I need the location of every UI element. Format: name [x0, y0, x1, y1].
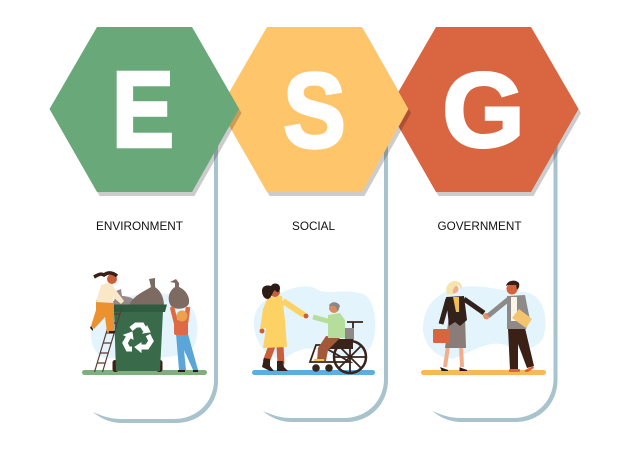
hexagon: S social: [220, 27, 411, 196]
heading: social: SOCIAL: [292, 219, 335, 233]
icon: rubbish bags in bin: [113, 278, 164, 306]
panel: social card edge: [263, 139, 388, 422]
figure: person lifting bag: [169, 279, 198, 372]
figure: man in wheelchair: [310, 302, 366, 373]
illustration: business handshake: [421, 281, 546, 375]
figure: businesswoman with briefcase: [433, 281, 489, 370]
icon: recycle arrows: [124, 325, 151, 352]
icon: ladder: [94, 307, 122, 372]
figure: woman climbing ladder: [90, 273, 124, 333]
hexagon: G governance: [388, 27, 581, 196]
heading: government: GOVERNMENT: [438, 219, 522, 233]
hexagon: S social: S: [283, 53, 346, 170]
icon: green bin: [111, 304, 167, 372]
illustration: helping wheelchair user: [252, 284, 375, 375]
illustration: recycling bin scene: [82, 273, 207, 375]
panel: environment card edge: [93, 140, 218, 423]
hexagon: G governance: G: [442, 52, 525, 170]
hexagon: E environment: [50, 27, 242, 196]
figure: woman in yellow dress: [260, 284, 308, 371]
heading: environment: ENVIRONMENT: [96, 219, 184, 233]
hexagon: E environment: E: [112, 50, 174, 170]
panel: government card edge: [432, 139, 558, 422]
figure: businessman with folder: [484, 281, 534, 372]
